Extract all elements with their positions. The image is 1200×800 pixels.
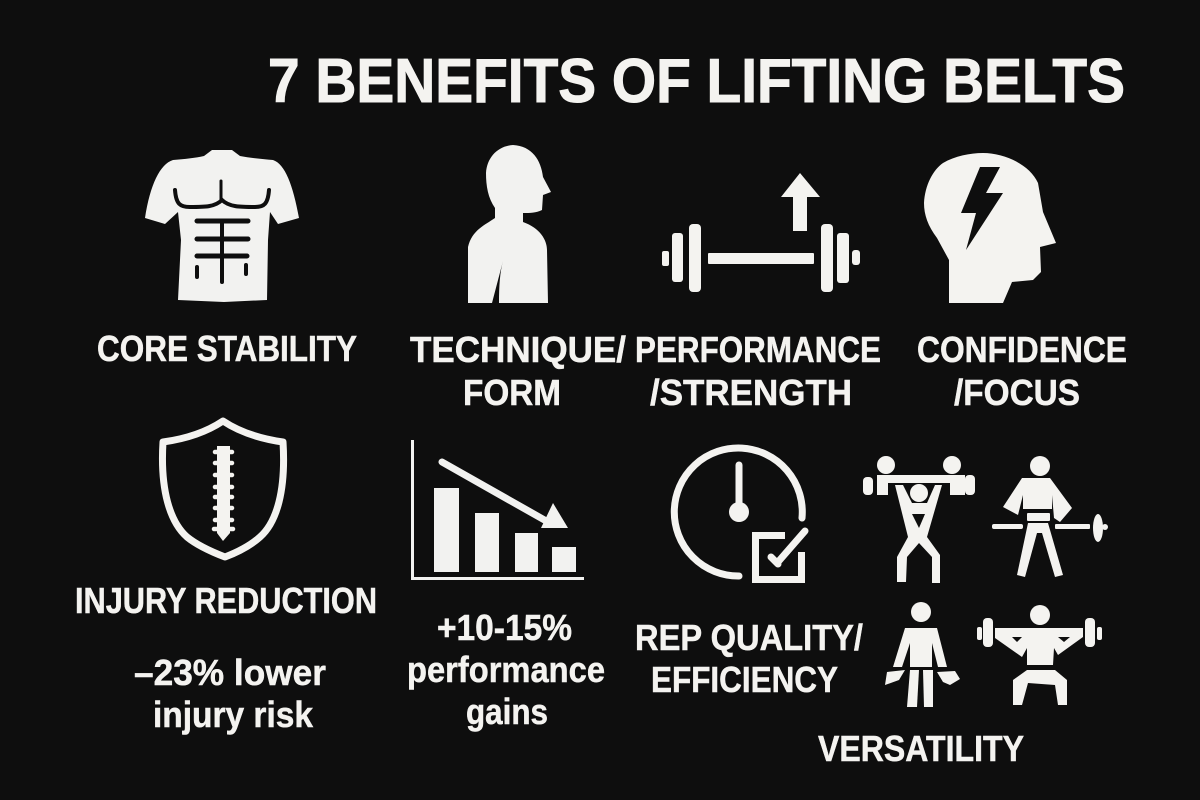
icon: person profile <box>468 145 551 303</box>
text: performance gains: gains <box>466 691 548 732</box>
label: performance strength: PERFORMANCE <box>635 329 881 370</box>
label: confidence focus <box>917 329 1127 413</box>
label: core stability: CORE STABILITY <box>97 328 357 369</box>
text: lower injury risk <box>134 652 326 735</box>
label: confidence focus: CONFIDENCE <box>917 329 1127 370</box>
icon: deadlift lifter <box>992 456 1108 577</box>
label: injury reduction: INJURY REDUCTION <box>75 580 377 621</box>
icon: squat lifter <box>977 605 1102 705</box>
label: rep quality efficiency: REP QUALITY/ <box>635 617 863 658</box>
text: lower injury risk: –23% lower <box>134 652 326 693</box>
title: 7 BENEFITS OF LIFTING BELTS <box>268 47 1125 116</box>
icon: shield with spine <box>162 421 284 557</box>
label: versatility: VERSATILITY <box>818 728 1024 769</box>
icon: head with lightning <box>924 153 1056 303</box>
label: technique form: TECHNIQUE/ <box>410 329 626 370</box>
text: performance gains: performance <box>407 649 605 690</box>
icon: overhead press lifter <box>863 456 975 583</box>
label: performance strength <box>635 329 881 413</box>
label: technique form: FORM <box>463 372 561 413</box>
text: performance gains: +10-15% <box>437 607 572 648</box>
icon: clock with checkbox <box>674 448 805 580</box>
text: performance gains <box>407 607 605 732</box>
label: rep quality efficiency <box>635 617 863 700</box>
label: performance strength: /STRENGTH <box>650 372 852 413</box>
chart: descending bars <box>411 440 584 580</box>
icon: torso <box>145 150 299 302</box>
icon: barbell with up arrow <box>662 173 860 292</box>
icon: standing lifter with weights <box>885 602 960 707</box>
label: confidence focus: /FOCUS <box>954 372 1080 413</box>
text: lower injury risk: injury risk <box>153 694 314 735</box>
label: rep quality efficiency: EFFICIENCY <box>651 659 838 700</box>
label: technique form <box>410 329 626 413</box>
